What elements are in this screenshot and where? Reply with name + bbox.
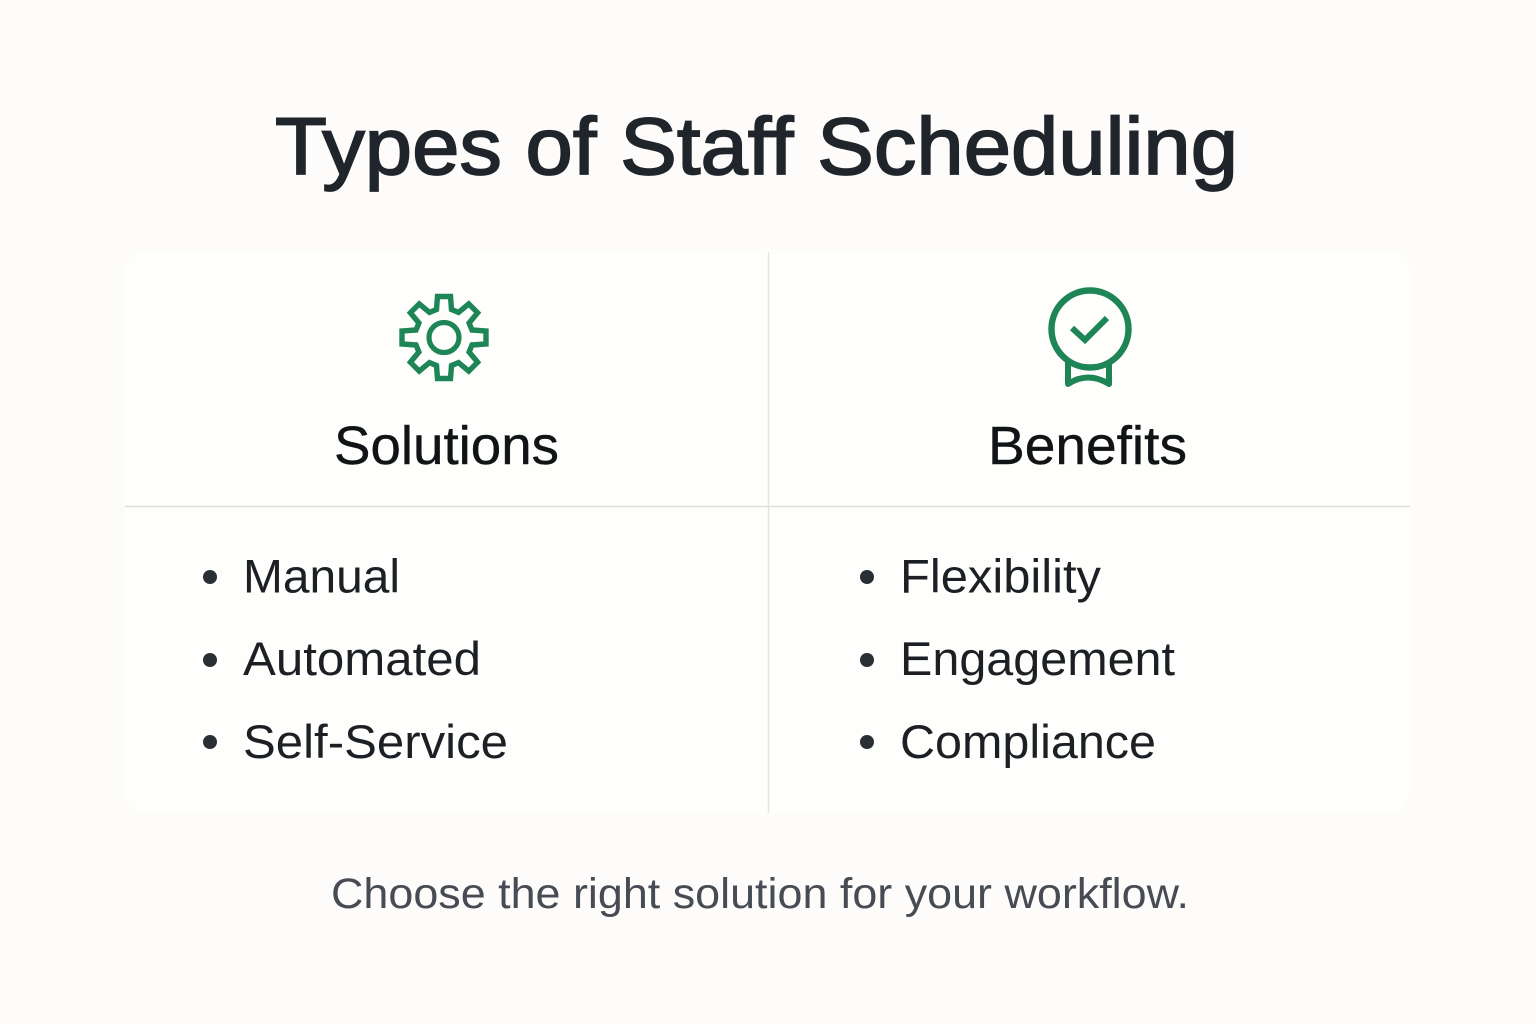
heading: Solutions: Solutions xyxy=(334,416,559,476)
list: benefit items xyxy=(860,550,1175,769)
icon: gear xyxy=(402,296,486,378)
heading: Benefits: Benefits xyxy=(988,416,1187,476)
list: benefit items: Compliance xyxy=(900,716,1156,769)
list: solution types: Self-Service xyxy=(243,716,508,769)
column: solutions xyxy=(203,296,559,769)
title: Types of Staff Scheduling xyxy=(275,102,1238,192)
list: solution types xyxy=(203,550,508,769)
icon: award ribbon with check xyxy=(1052,290,1128,384)
footer tagline: Choose the right solution for your workflow. xyxy=(331,870,1189,918)
column: benefits xyxy=(860,290,1187,769)
list: benefit items: Engagement xyxy=(900,633,1175,686)
list: benefit items: Flexibility xyxy=(900,550,1101,604)
panel: comparison table xyxy=(125,250,1410,813)
list: solution types: Automated xyxy=(243,633,481,686)
list: solution types: Manual xyxy=(243,550,400,604)
